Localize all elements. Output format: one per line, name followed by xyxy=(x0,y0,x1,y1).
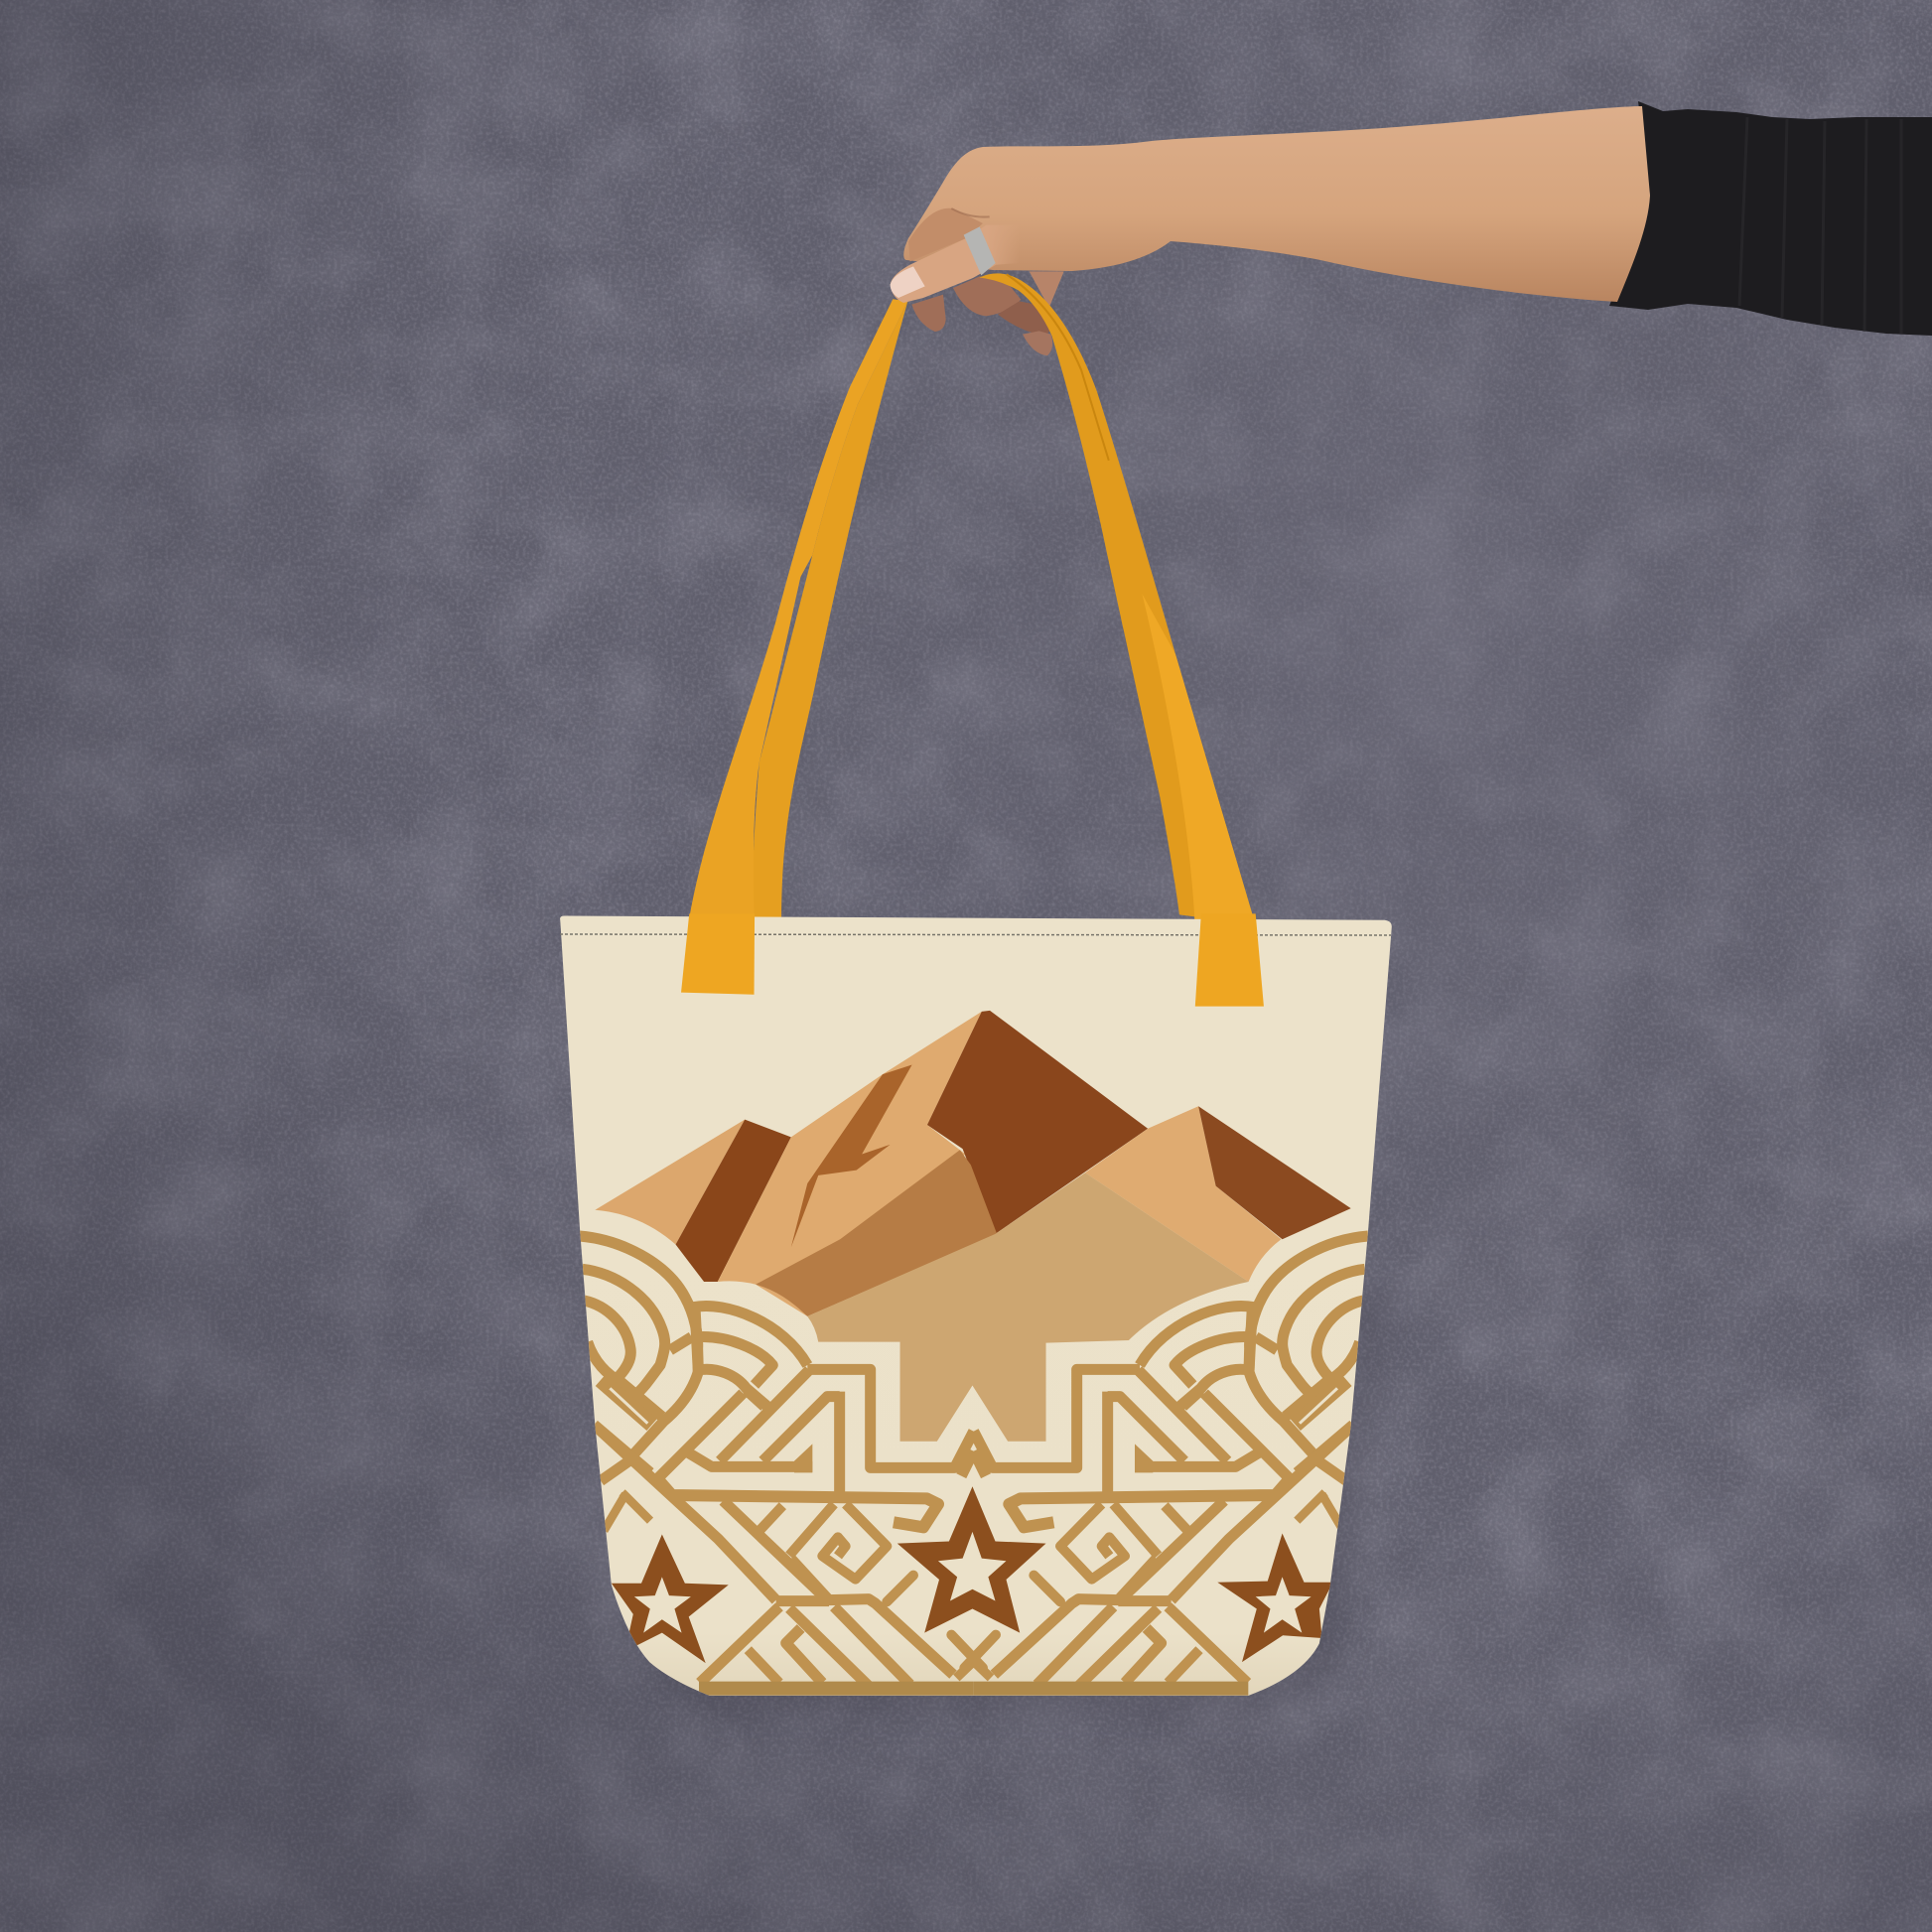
illustration: woven geometric pattern xyxy=(579,1236,1368,1689)
stars xyxy=(612,1486,1333,1663)
right mountain light face xyxy=(1085,1106,1281,1282)
tan foreground xyxy=(807,1173,1249,1442)
center star xyxy=(897,1486,1046,1633)
left tab xyxy=(681,913,755,995)
rock slash xyxy=(791,1064,912,1247)
right strap xyxy=(979,273,1258,933)
right tab xyxy=(1195,913,1264,1007)
handles: yellow straps xyxy=(687,273,1258,933)
pattern right half xyxy=(964,1236,1368,1689)
bag shadow on wall xyxy=(616,1291,1390,1718)
left hill xyxy=(595,1120,745,1245)
top hem stitch line xyxy=(560,934,1391,935)
left star xyxy=(612,1535,729,1663)
front left strap xyxy=(687,299,907,933)
sleeve: black sweater xyxy=(1609,101,1932,336)
illustration: mountains xyxy=(595,1011,1351,1442)
right star xyxy=(1217,1533,1333,1662)
right strap ridge xyxy=(1007,274,1109,461)
central peak light face xyxy=(718,1012,982,1316)
pattern left half xyxy=(579,1236,983,1689)
arm and hand xyxy=(903,106,1650,302)
icon: back fingers behind strap xyxy=(911,271,1064,355)
mid shadow slope xyxy=(756,1150,997,1316)
bag body xyxy=(560,915,1392,1696)
central peak dark face xyxy=(927,1011,1148,1234)
icon: thumb with nail and ring xyxy=(891,208,1020,303)
back left strap xyxy=(752,301,907,921)
right mountain dark face xyxy=(1198,1106,1351,1239)
icon: silver ring xyxy=(964,226,996,275)
index finger side shade xyxy=(908,208,983,261)
strap tabs stitched on bag xyxy=(681,913,1264,1007)
right strap light outer ply xyxy=(1142,594,1258,933)
